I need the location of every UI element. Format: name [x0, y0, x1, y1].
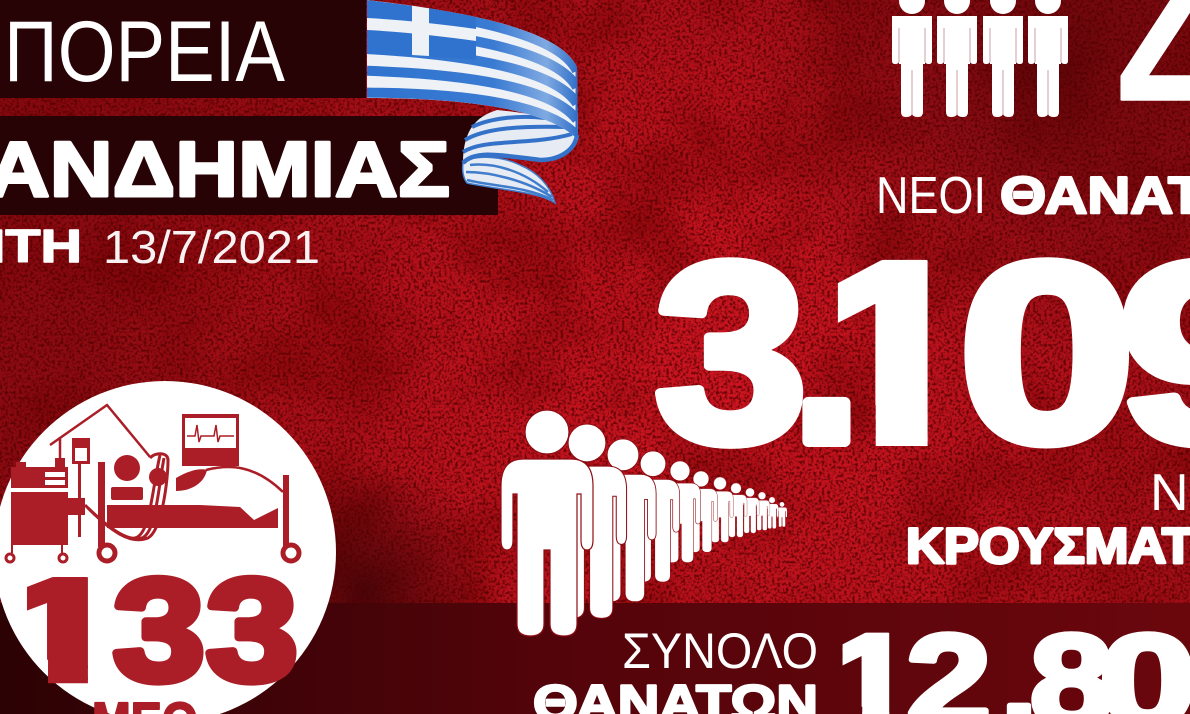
panel: ICU count circle [0, 381, 336, 714]
figure: 133: 3 [113, 549, 205, 711]
date line: 13/7/2021 [103, 221, 320, 273]
panel: title line two [0, 116, 498, 215]
ribbon main stripes [367, 0, 579, 150]
date line [0, 220, 320, 273]
IV stand and bag [50, 405, 150, 537]
icon: Greek flag ribbon [367, 0, 579, 203]
breathing tubes [85, 454, 168, 540]
bottom dark band [0, 603, 1190, 714]
icon: ICU bed and patient [6, 405, 299, 562]
ribbon loop [463, 110, 577, 163]
monitor [182, 414, 239, 466]
ribbon tail [463, 157, 555, 203]
bed frame [98, 462, 299, 561]
figure: new cases 3.109: 1 [808, 209, 983, 495]
figure: total deaths 12.801 [842, 631, 1190, 714]
flag canton with cross [367, 0, 476, 60]
label: new deaths: ΝΕΟΙ [876, 167, 986, 225]
icon: queue of people [501, 410, 787, 636]
label: new cases [906, 464, 1190, 574]
panel: title line one [0, 0, 366, 100]
patient [114, 455, 283, 492]
icon: four standing people [892, 0, 1068, 117]
figure: new cases 3.109: 3 [654, 210, 808, 496]
figure: 133 [26, 574, 296, 686]
figure: new cases 3.109 [654, 257, 1190, 449]
figure: 133: 3 [206, 549, 298, 711]
heading: ΠΟΡΕΙΑ: ΠΟΡΕΙΑ [4, 4, 286, 100]
label: total deaths: ΣΥΝΟΛΟ [622, 623, 818, 679]
figure: new cases 3.109: 0 [958, 210, 1136, 496]
label: new deaths [876, 167, 1190, 225]
label: total deaths [533, 623, 818, 714]
figure: 133: 1 [0, 549, 131, 711]
figure: new cases 3.109: . [791, 210, 862, 496]
ventilator machine [6, 462, 85, 562]
